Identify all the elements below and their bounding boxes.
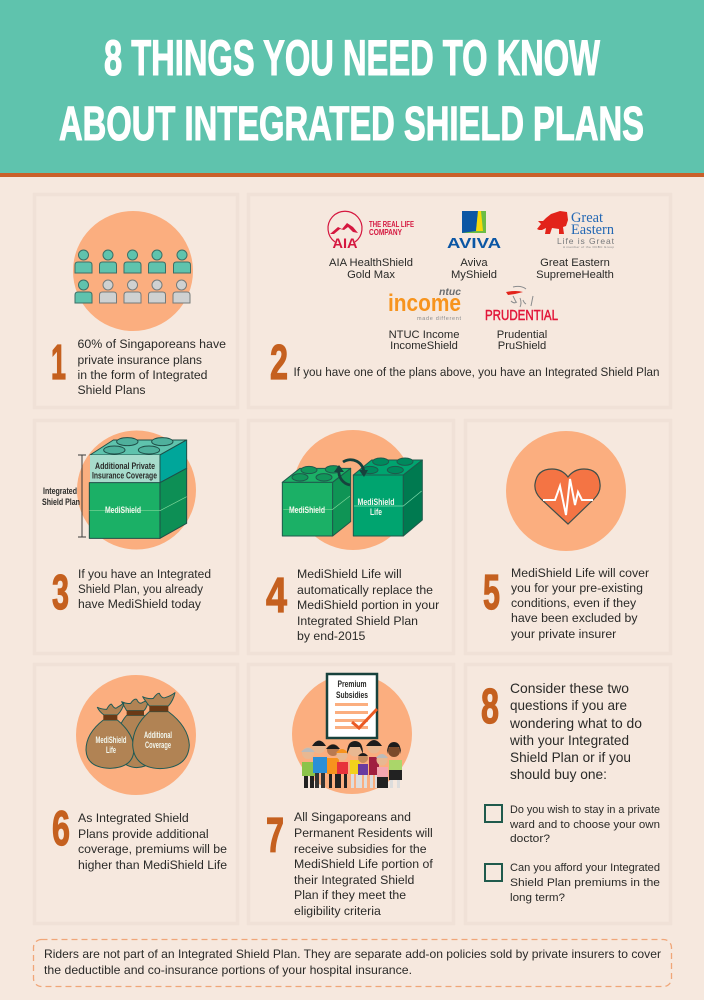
panel 2: insurer plans: [248, 194, 670, 408]
panel 1: 60 percent of Singaporeans: [34, 194, 238, 408]
footer callout: riders: [34, 940, 672, 986]
text: panel 7: All Singaporeans and: [294, 810, 411, 824]
plan labels: first row: MyShield: [451, 269, 497, 281]
plan labels: second row: [389, 329, 547, 352]
number 2: 2: [270, 336, 288, 390]
logo: Aviva: AVIVA: [447, 235, 501, 252]
text: panel 4: MediShield portion in your: [297, 598, 439, 612]
number 3: 3: [52, 566, 69, 620]
logo: AIA: AIA: [332, 235, 358, 251]
icon: group of people: [301, 740, 402, 788]
text: panel 5: MediShield Life will cover: [511, 566, 649, 580]
text: panel 3: have MediShield today: [78, 597, 202, 611]
checkbox question 1: [485, 804, 660, 845]
text: panel 1: Shield Plans: [78, 383, 146, 397]
text: panel 3: If you have an Integrated: [78, 567, 211, 581]
header banner: [0, 0, 704, 177]
text: panel 7: Permanent Residents will: [294, 826, 433, 840]
text: panel 5: you for your pre-existing: [511, 581, 643, 595]
icon: stacked blocks: Insurance Coverage: [92, 470, 157, 482]
text: panel 4: Integrated Shield Plan: [297, 614, 418, 628]
text: panel 4: MediShield Life will: [297, 567, 402, 581]
footer callout: riders: the deductible and co-insurance portions of your hospital insurance.: [44, 963, 412, 977]
checkbox question 2: long term?: [510, 892, 565, 904]
text: panel 5: [511, 566, 649, 641]
logo: Great Eastern: A member of the OCBC Group: [563, 245, 614, 249]
text: panel 8 intro: with your Integrated: [509, 733, 629, 748]
panel 4: MediShield Life replacement: [248, 420, 454, 654]
plan labels: first row: Gold Max: [347, 269, 395, 281]
panel 5: pre-existing conditions: [466, 420, 670, 654]
text: panel 8 intro: [509, 681, 642, 782]
title: [59, 30, 644, 151]
logo: NTUC Income: made different: [417, 316, 461, 322]
logo: Great Eastern: Life is Great: [557, 236, 615, 246]
plan labels: second row: IncomeShield: [390, 340, 458, 352]
number 6: 6: [52, 802, 70, 856]
number 1: 1: [51, 336, 66, 390]
panel 7: premium subsidies: [248, 664, 454, 924]
icon: stacked blocks: [42, 438, 187, 538]
icon: two blocks with swap arrows: [282, 458, 422, 536]
text: panel 8 intro: wondering what to do: [509, 716, 642, 731]
text: panel 6: Plans provide additional: [78, 827, 209, 841]
icon: money bags: Life: [106, 745, 116, 755]
text: panel 3: Shield Plan, you already: [78, 582, 204, 596]
checkbox question 1: Do you wish to stay in a private: [510, 804, 660, 816]
footer callout: riders: Riders are not part of an Integrated Shield Plan. They are separate add-on policies sold by private insurers to cover: [44, 947, 661, 961]
text: panel 5: your private insurer: [511, 627, 616, 641]
number 4: 4: [266, 569, 287, 623]
text: panel 1: 60% of Singaporeans have: [78, 337, 226, 351]
text: panel 8 intro: should buy one:: [510, 767, 607, 782]
text: panel 7: [294, 810, 433, 918]
logo: Great Eastern: Great: [571, 210, 604, 226]
logo: Aviva: [447, 211, 501, 252]
logo: NTUC Income: income: [388, 290, 461, 317]
checkbox question 1: ward and to choose your own: [509, 819, 660, 831]
logo: NTUC Income: ntuc: [439, 287, 461, 298]
icon: row of people, 6 of 10 teal: [75, 250, 190, 303]
text: panel 7: their Integrated Shield: [294, 873, 414, 887]
text: panel 4: [297, 567, 439, 643]
number 8: 8: [481, 680, 499, 734]
icon: money bags: Additional: [144, 730, 172, 740]
text: panel 6: higher than MediShield Life: [78, 858, 227, 872]
text: panel 7: Plan if they meet the: [294, 888, 406, 902]
panel 6: premiums: [34, 664, 238, 924]
text: panel 1: private insurance plans: [78, 353, 202, 367]
panel 3: MediShield within Integrated Shield Plan: [34, 420, 238, 654]
text: panel 3: [78, 567, 211, 611]
icon: heart with pulse: [535, 469, 600, 524]
logo: AIA: [328, 211, 414, 251]
text: panel 4: automatically replace the: [297, 583, 433, 597]
text: panel 1: in the form of Integrated: [78, 368, 208, 382]
text: panel 5: have been excluded by: [511, 611, 638, 625]
checkbox question 1: doctor?: [510, 833, 550, 845]
text: panel 8 intro: Consider these two: [510, 681, 629, 696]
icon: money bags: Coverage: [145, 740, 171, 750]
text: panel 6: [78, 811, 227, 872]
plan labels: first row: Great Eastern: [540, 257, 610, 269]
logo: Prudential: [485, 286, 558, 324]
icon: premium subsidies document: Subsidies: [336, 690, 368, 700]
logo: Great Eastern: Eastern: [571, 222, 614, 238]
plan labels: second row: NTUC Income: [389, 329, 459, 341]
text: panel 1: [78, 337, 226, 397]
text: panel 5: conditions, even if they: [511, 596, 637, 610]
icon: two blocks with swap arrows: Life: [370, 507, 382, 517]
plan labels: first row: SupremeHealth: [536, 269, 614, 281]
text: panel 2: If you have one of the plans above, you have an Integrated Shield Plan: [294, 365, 660, 379]
plan labels: second row: PruShield: [498, 340, 546, 352]
checkbox question 2: [485, 862, 660, 904]
number 7: 7: [266, 809, 284, 863]
text: panel 7: receive subsidies for the: [294, 842, 427, 856]
icon: money bags: MediShield: [96, 735, 126, 745]
icon: premium subsidies document: [327, 674, 377, 738]
text: panel 6: As Integrated Shield: [78, 811, 189, 825]
logo: NTUC Income: [388, 287, 461, 322]
text: panel 6: coverage, premiums will be: [78, 842, 227, 856]
text: panel 8 intro: Shield Plan or if you: [510, 750, 631, 765]
text: panel 8 intro: questions if you are: [510, 698, 627, 713]
text: panel 7: eligibility criteria: [294, 904, 381, 918]
plan labels: first row: Aviva: [460, 257, 488, 269]
panel 8: two questions: [466, 664, 670, 924]
icon: premium subsidies document: Premium: [338, 679, 366, 689]
icon: two blocks with swap arrows: MediShield: [358, 497, 394, 507]
text: panel 7: MediShield Life portion of: [294, 857, 433, 871]
logo: AIA: COMPANY: [369, 228, 403, 237]
icon: stacked blocks: Integrated: [43, 486, 77, 497]
icon: stacked blocks: Additional Private: [95, 461, 155, 472]
logo: Great Eastern: [537, 210, 615, 249]
number 5: 5: [483, 566, 500, 620]
checkbox question 2: Can you afford your Integrated: [510, 862, 660, 874]
icon: stacked blocks: Shield Plan: [42, 497, 80, 508]
plan labels: second row: Prudential: [497, 329, 547, 341]
icon: money bags: [86, 693, 189, 769]
checkbox question 2: Shield Plan premiums in the: [510, 877, 660, 889]
logo: AIA: THE REAL LIFE: [369, 220, 414, 229]
icon: stacked blocks: MediShield: [105, 505, 141, 515]
logo: Prudential: PRUDENTIAL: [485, 307, 558, 324]
icon: two blocks with swap arrows: MediShield: [289, 505, 325, 515]
plan labels: first row: AIA HealthShield: [329, 257, 413, 269]
text: panel 4: by end-2015: [297, 629, 366, 643]
plan labels: first row: [329, 257, 614, 281]
